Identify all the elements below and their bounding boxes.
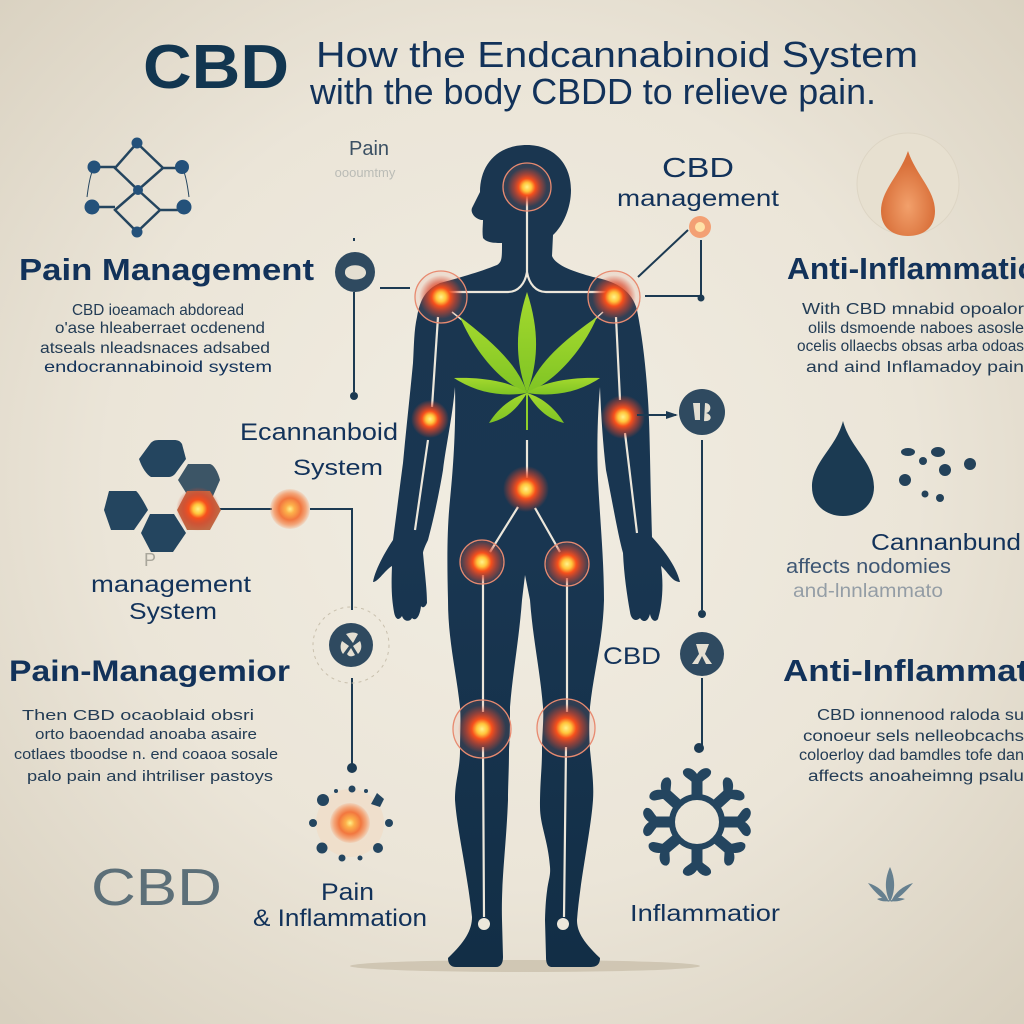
title: with the body CBDD to relieve pain. (309, 71, 876, 112)
right column text: and aind Inflamadoy pain (806, 359, 1024, 376)
left column text 2 (9, 655, 290, 785)
label: cannabinoid affects: Cannanbund (871, 529, 1021, 555)
connector lines and arrows (210, 230, 702, 765)
label: pain & inflammation: & Inflammation (253, 905, 427, 932)
label: cannabinoid affects: and-lnnlammato (793, 581, 943, 602)
left column text: CBD ioeamach abdoread (72, 302, 244, 319)
icon: network top left (84, 138, 192, 238)
top right orange node (689, 216, 711, 238)
label: pain: oooumtmy (335, 165, 396, 180)
right column text: With CBD mnabid opoalor (802, 301, 1024, 318)
label: endocannabinoid system: Ecannanboid (240, 419, 398, 446)
right column text: ocelis ollaecbs obsas arba odoas (797, 338, 1024, 355)
faint letter: P (144, 550, 156, 570)
foot markers (478, 918, 569, 930)
title: How the Endcannabinoid System (316, 34, 918, 75)
left column text: atseals nleadsnaces adsabed (40, 340, 270, 357)
label: pain & inflammation (253, 879, 427, 932)
label: CBD logo: CBD (91, 859, 222, 917)
connector end dots (347, 294, 706, 773)
label: cbd management top right: management (617, 185, 780, 211)
left column text: endocrannabinoid system (44, 359, 272, 376)
label: cbd management top right: CBD (662, 152, 734, 183)
right column text 2: coloerloy dad bamdles tofe dan (799, 747, 1024, 764)
icon: small leaf (868, 867, 913, 902)
label: management system (91, 571, 252, 624)
icon: dark drop (812, 421, 874, 516)
dashed halo (313, 607, 389, 683)
title: CBD (143, 33, 289, 102)
right column text 2: conoeur sels nelleobcachs (803, 728, 1024, 745)
small node icons (329, 252, 725, 676)
left column text (19, 252, 314, 376)
right column text: olils dsmoende naboes asosle (808, 320, 1024, 337)
icon: hexagons (104, 440, 221, 552)
left column text: Pain Management (19, 252, 314, 287)
label: cannabinoid affects: affects nodomies (786, 556, 951, 578)
right column text 2: affects anoaheimng psalu (808, 768, 1024, 785)
right column text 2: Anti-Inflammati (783, 653, 1024, 688)
human body silhouette (373, 145, 680, 967)
icon: orange drop (857, 133, 959, 236)
label: endocannabinoid system: System (293, 455, 383, 480)
right column text 2: CBD ionnenood raloda su (817, 707, 1024, 724)
label: cbd management top right (617, 152, 780, 211)
label: CBD middle right: CBD (603, 643, 661, 670)
icon: inflammation dot bottom left (309, 786, 393, 862)
left column text 2: palo pain and ihtriliser pastoys (27, 768, 273, 785)
left column text 2: orto baoendad anoaba asaire (35, 726, 257, 743)
right column text (787, 251, 1024, 376)
left column text: o'ase hleaberraet ocdenend (55, 320, 265, 337)
right column text 2 (783, 653, 1024, 785)
glow nodes left (176, 487, 310, 531)
icon: molecule dots (899, 447, 976, 502)
pain points with glow (411, 163, 645, 758)
label: cannabinoid affects (786, 529, 1021, 602)
floor shadow (350, 960, 700, 972)
left column text 2: cotlaes tboodse n. end coaoa sosale (14, 746, 278, 763)
left column text 2: Then CBD ocaoblaid obsri (22, 707, 254, 724)
label: pain: Pain (349, 138, 389, 160)
label: pain & inflammation: Pain (321, 879, 374, 906)
label: pain (335, 138, 396, 180)
left column text 2: Pain-Managemior (9, 655, 290, 688)
label: inflammation: Inflammatior (630, 900, 780, 926)
node glyphs (341, 265, 712, 664)
cannabis leaf (454, 292, 600, 430)
body connector lines (415, 186, 637, 917)
icon: gear virus (643, 768, 751, 876)
label: management system: management (91, 571, 252, 597)
label: endocannabinoid system (240, 419, 398, 480)
label: management system: System (129, 598, 217, 624)
title (143, 33, 918, 112)
